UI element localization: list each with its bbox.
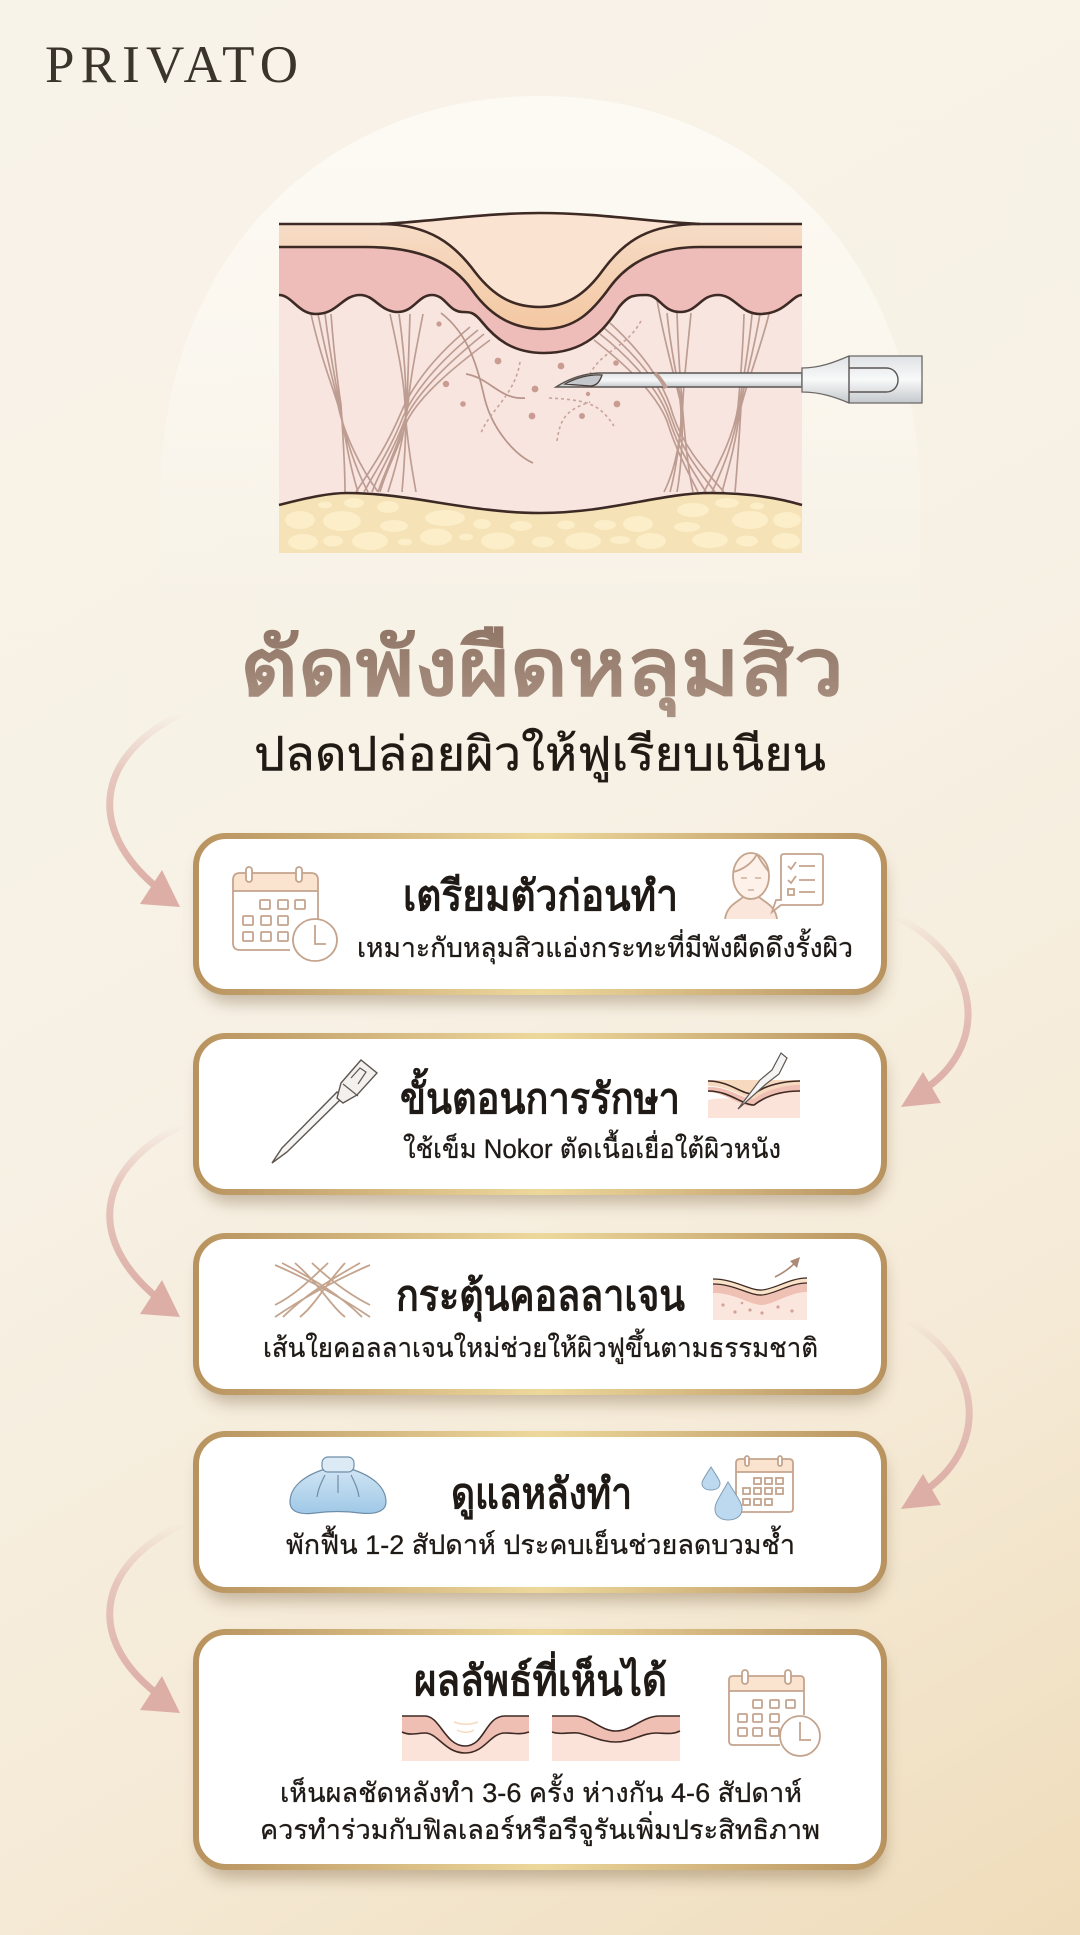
icon: face with checklist — [725, 853, 823, 919]
heading: ขั้นตอนการรักษา — [400, 1067, 680, 1122]
arrow: to step 1 — [110, 713, 183, 907]
description line 1: เห็นผลชัดหลังทำ 3-6 ครั้ง ห่างกัน 4-6 สัปดาห์ — [280, 1773, 802, 1808]
logo: PRIVATO: PRIVATO — [45, 36, 298, 94]
icon: needle — [272, 1060, 377, 1163]
icon: skin incision — [708, 1053, 800, 1118]
fat layer — [279, 493, 802, 553]
icon: skin before — [402, 1716, 529, 1761]
dermis layer — [279, 247, 802, 353]
arrow: step 4 to step 5 — [110, 1524, 183, 1713]
arrow: step 3 to step 4 — [901, 1320, 969, 1509]
illustration: skin cross-section with needle — [279, 213, 922, 553]
icon: skin after — [552, 1716, 680, 1761]
description: เหมาะกับหลุมสิวแอ่งกระทะที่มีพังผืดดึงรั้งผิว — [357, 928, 853, 965]
arrow: step 1 to step 2 — [895, 916, 968, 1107]
subheading: ปลดปล่อยผิวให้ฟูเรียบเนียน — [254, 727, 826, 783]
panel: step 2 treatment — [196, 1036, 885, 1203]
panel: step 1 prepare — [196, 836, 885, 1003]
heading: เตรียมตัวก่อนทำ — [403, 872, 678, 919]
epidermis layer — [279, 224, 802, 329]
icon: skin with rising arrow — [713, 1257, 807, 1320]
panel: step 5 results — [196, 1632, 885, 1879]
arrow: step 2 to step 3 — [110, 1125, 183, 1317]
icon: calendar with clock — [729, 1670, 820, 1756]
icon: ice pack — [290, 1457, 386, 1514]
crater fill — [380, 213, 700, 307]
description: พักฟื้น 1-2 สัปดาห์ ประคบเย็นช่วยลดบวมช้ำ — [286, 1525, 795, 1560]
outlines — [279, 213, 802, 513]
description line 2: ควรทำร่วมกับฟิลเลอร์หรือรีจูรันเพิ่มประสิทธิภาพ — [260, 1811, 820, 1846]
background arch — [160, 96, 920, 620]
collagen fibres — [311, 300, 769, 492]
heading: ผลลัพธ์ที่เห็นได้ — [414, 1651, 667, 1704]
main heading: ตัดพังผืดหลุมสิว — [240, 623, 844, 718]
needle — [556, 356, 922, 403]
panel: step 4 aftercare — [196, 1434, 885, 1601]
heading: ดูแลหลังทำ — [451, 1470, 632, 1520]
scar dashes and dots — [436, 321, 641, 441]
heading: กระตุ้นคอลลาเจน — [396, 1272, 685, 1322]
description: เส้นใยคอลลาเจนใหม่ช่วยให้ผิวฟูขึ้นตามธรรมชาติ — [263, 1328, 818, 1364]
description: ใช้เข็ม Nokor ตัดเนื้อเยื่อใต้ผิวหนัง — [403, 1129, 781, 1164]
panel: step 3 collagen — [196, 1236, 885, 1403]
icon: water drops and calendar — [702, 1456, 793, 1520]
icon: calendar with clock — [233, 867, 337, 961]
dermis background — [279, 224, 802, 524]
icon: collagen fibres — [275, 1263, 370, 1317]
